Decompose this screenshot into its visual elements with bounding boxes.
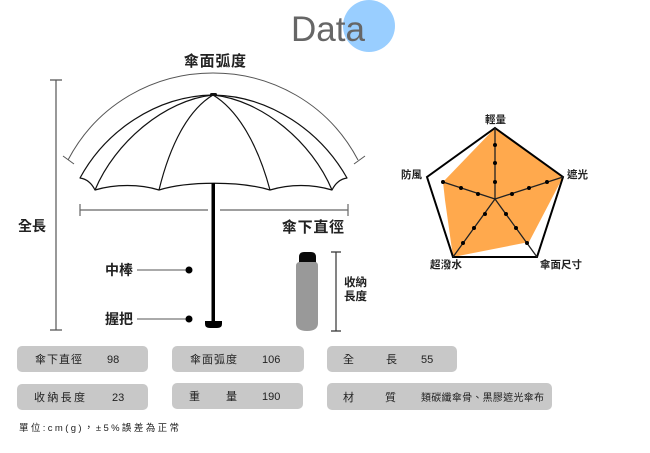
spec pill: full length: 全 (343, 353, 354, 366)
label: folded length (344, 275, 368, 303)
spec pill: folded length (17, 384, 148, 410)
label: full length: 全長 (18, 218, 46, 234)
spec pill: folded length: 收納長度 (34, 390, 85, 404)
radar axes (443, 128, 563, 257)
spec pill: arc (172, 346, 304, 372)
spec pill: arc: 106 (262, 354, 280, 366)
title: Data with blue circle: Data (291, 10, 365, 49)
radar labels: 輕量 (485, 113, 506, 126)
spec pill: folded length: 23 (112, 392, 124, 404)
callout: shaft: 中棒 (105, 262, 133, 278)
diameter dimension line (80, 204, 348, 216)
arc dimension line (63, 73, 365, 164)
spec pill: arc: 傘面弧度 (190, 352, 237, 366)
umbrella shaft and handle (205, 183, 222, 328)
umbrella tip (210, 93, 217, 96)
spec pill: weight: 量 (226, 390, 237, 403)
label: folded length: 收納 (344, 275, 367, 289)
folded umbrella (296, 252, 318, 331)
callout: handle: 握把 (105, 311, 133, 327)
radar chart (401, 113, 588, 271)
radar frame (427, 128, 563, 257)
title: Data with blue circle (291, 0, 395, 52)
radar labels: 遮光 (567, 168, 588, 181)
umbrella canopy (80, 95, 347, 190)
spec pill: diameter: 傘下直徑 (35, 352, 82, 366)
callout: shaft (105, 262, 192, 278)
callout: handle (105, 311, 192, 327)
spec pill: weight (172, 383, 303, 409)
footnote: 單位:cm(g)，±5%誤差為正常 (19, 422, 179, 434)
radar labels: 傘面尺寸 (540, 258, 582, 271)
radar labels: 防風 (401, 168, 422, 181)
spec pill: full length (327, 346, 457, 372)
radar tick dots (441, 143, 549, 245)
label: diameter: 傘下直徑 (282, 218, 344, 236)
spec pill: full length: 長 (386, 353, 397, 366)
spec pill: material: 質 (385, 390, 396, 404)
label: folded length: 長度 (344, 289, 368, 303)
spec pill: material: 材 (343, 390, 354, 404)
folded length dimension line (331, 252, 341, 331)
spec pill: material: 類碳纖傘骨、黑膠遮光傘布 (421, 391, 544, 404)
spec pill: weight: 190 (262, 391, 280, 403)
spec pill: full length: 55 (421, 354, 433, 366)
spec pill: material (327, 383, 552, 410)
full length dimension line (50, 80, 62, 330)
radar labels (401, 113, 588, 271)
spec pill: weight: 重 (189, 389, 200, 403)
heading: canopy arc: 傘面弧度 (184, 52, 246, 70)
spec pill: diameter (17, 346, 148, 372)
radar data area (443, 128, 563, 257)
radar labels: 超潑水 (430, 258, 462, 271)
spec pill: diameter: 98 (107, 354, 119, 366)
